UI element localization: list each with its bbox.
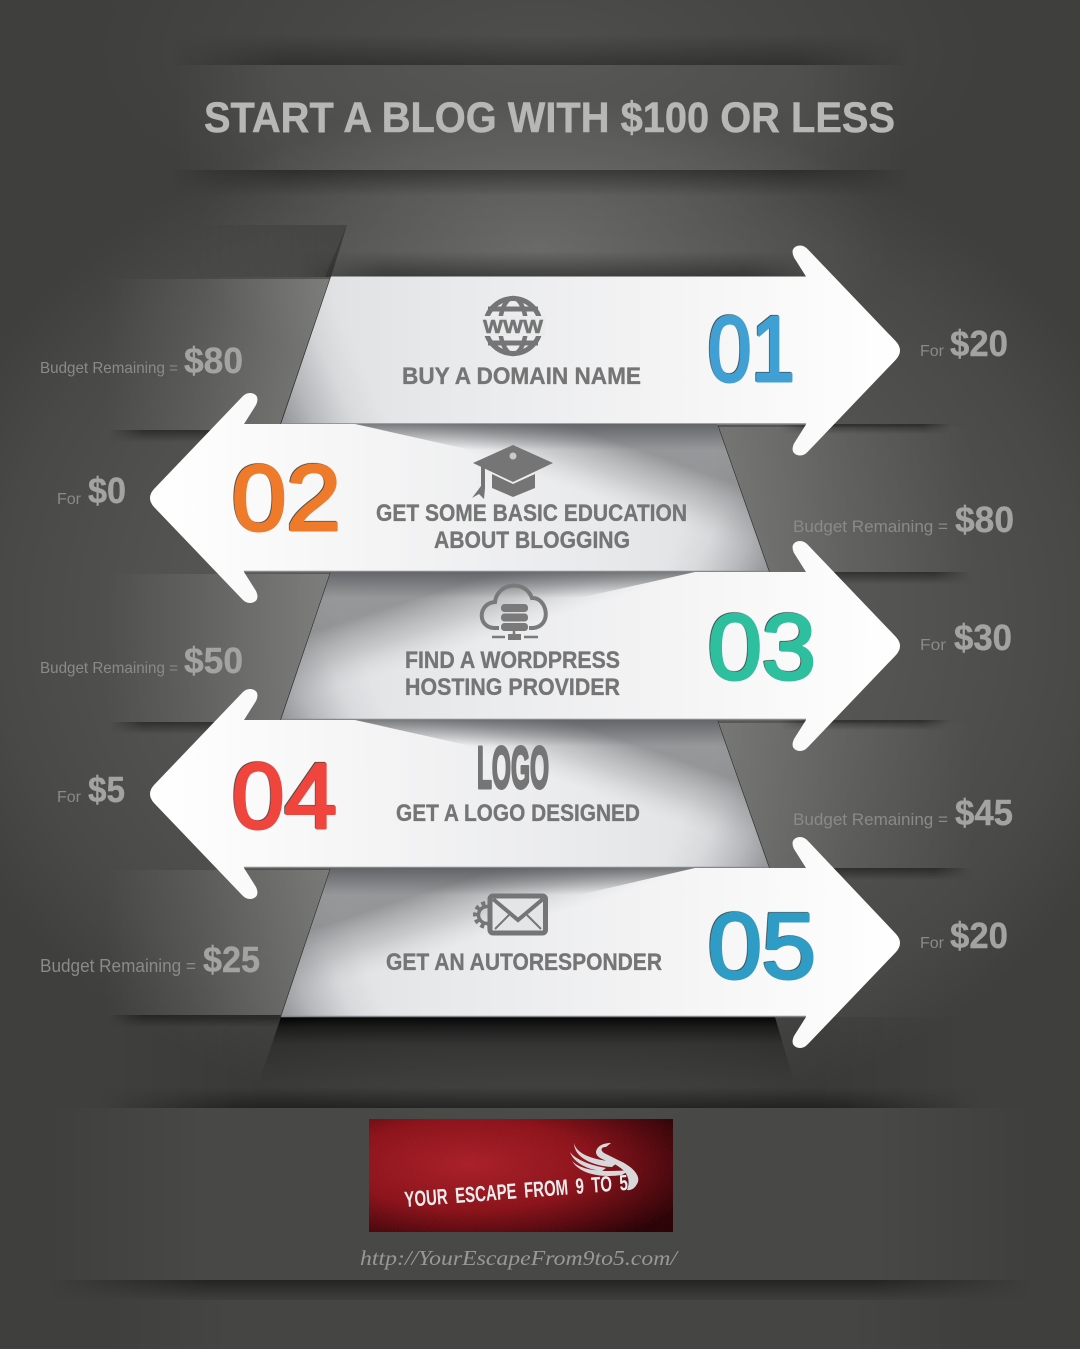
number 03: 03 — [708, 595, 816, 699]
bottom edge 05 — [281, 1016, 806, 1018]
cost: step 05 — [920, 915, 1008, 956]
bottom edge 01 — [281, 423, 806, 425]
cost: step 04: For — [57, 789, 82, 806]
arrow shape 04 — [150, 689, 769, 899]
label: wordpress hosting: HOSTING PROVIDER — [405, 674, 620, 701]
cost: step 02 — [57, 470, 126, 511]
icon: envelope with gear — [475, 896, 546, 933]
remaining: after step 01: $80 — [184, 340, 243, 381]
top shadow 05 — [321, 868, 695, 897]
remaining: after step 01 — [40, 340, 243, 381]
arrow shape 03 — [281, 541, 900, 751]
icon: graduation cap — [472, 445, 553, 499]
icon: www globe: WWW — [483, 317, 543, 337]
panel: step 04 arrow — [150, 689, 769, 899]
top shadow 03 — [321, 572, 695, 600]
background — [0, 0, 1080, 1072]
bottom edge 04 — [244, 866, 769, 868]
remaining: after step 03 — [40, 640, 243, 681]
arrow shape 02 — [150, 393, 769, 603]
icon: cloud server — [482, 586, 546, 640]
cost: step 01 — [920, 323, 1008, 364]
remaining: after step 05: $25 — [203, 939, 260, 980]
logo: your escape from 9 to 5 — [369, 1119, 673, 1232]
shadow wedge 02 — [385, 424, 764, 558]
arrow shape 01 — [281, 245, 900, 456]
cost: step 02: $0 — [88, 470, 126, 511]
label: basic education: ABOUT BLOGGING — [434, 527, 630, 554]
remaining: after step 02 — [793, 499, 1014, 540]
cost: step 01: For — [920, 343, 945, 360]
title: START A BLOG WITH $100 OR LESS — [204, 94, 895, 142]
label: get an autoresponder: GET AN AUTORESPONDER — [386, 949, 662, 976]
shadow wedge 03 — [286, 572, 695, 706]
remaining: after step 03: $50 — [184, 640, 243, 681]
cost: step 03: For — [920, 637, 947, 654]
cost: step 03 — [920, 617, 1012, 658]
cost: step 04 — [57, 769, 125, 810]
website url: http://YourEscapeFrom9to5.com/ — [360, 1246, 679, 1270]
bottom edge 02 — [244, 570, 769, 572]
corner shading 05 — [281, 868, 430, 1017]
number 02: 02 — [232, 446, 341, 550]
text: LOGO — [477, 735, 549, 801]
label: basic education: GET SOME BASIC EDUCATION — [376, 500, 687, 527]
label: get a logo designed: GET A LOGO DESIGNED — [396, 800, 640, 827]
number 05: 05 — [708, 894, 816, 998]
bottom edge 03 — [281, 718, 806, 720]
label: wordpress hosting: FIND A WORDPRESS — [405, 647, 620, 674]
icon: www globe — [481, 298, 545, 354]
cost: step 03: $30 — [954, 617, 1012, 658]
remaining: after step 02: Budget Remaining = — [793, 517, 948, 536]
shadow wedge 04 — [385, 720, 764, 854]
cost: step 02: For — [57, 491, 82, 508]
panel: step 01 arrow — [281, 245, 900, 456]
corner shading 04 — [620, 720, 769, 868]
label: wordpress hosting — [405, 647, 620, 701]
label: buy a domain name: BUY A DOMAIN NAME — [402, 363, 641, 390]
corner shading 03 — [281, 572, 430, 720]
cost: step 05: For — [920, 935, 945, 952]
top shadow 02 — [355, 424, 727, 452]
panel: folded background bands — [105, 225, 975, 1108]
cost: step 01: $20 — [950, 323, 1008, 364]
corner shading 01 — [281, 276, 430, 424]
panel: step 02 arrow — [150, 393, 769, 603]
corner shading 02 — [620, 424, 769, 572]
footer band — [98, 1094, 982, 1294]
top shadow 04 — [355, 720, 727, 748]
logo: your escape from 9 to 5: YOUR ESCAPE FROM 9 TO 5 — [403, 1170, 629, 1212]
remaining: after step 04: Budget Remaining = — [793, 810, 948, 829]
remaining: after step 02: $80 — [955, 499, 1014, 540]
number 01: 01 — [708, 297, 795, 401]
label: basic education — [376, 500, 687, 554]
remaining: after step 01: Budget Remaining = — [40, 360, 178, 377]
shadow wedge 05 — [286, 868, 695, 1003]
arrow shape 05 — [281, 837, 900, 1048]
remaining: after step 05 — [40, 939, 260, 980]
remaining: after step 04 — [793, 792, 1013, 833]
cost: step 05: $20 — [950, 915, 1008, 956]
title band — [213, 65, 867, 190]
panel: step 05 arrow — [281, 837, 900, 1048]
remaining: after step 04: $45 — [955, 792, 1013, 833]
number 04: 04 — [232, 744, 337, 848]
panel: step 03 arrow — [281, 541, 900, 751]
cost: step 04: $5 — [88, 769, 125, 810]
remaining: after step 05: Budget Remaining = — [40, 956, 196, 976]
remaining: after step 03: Budget Remaining = — [40, 660, 178, 677]
